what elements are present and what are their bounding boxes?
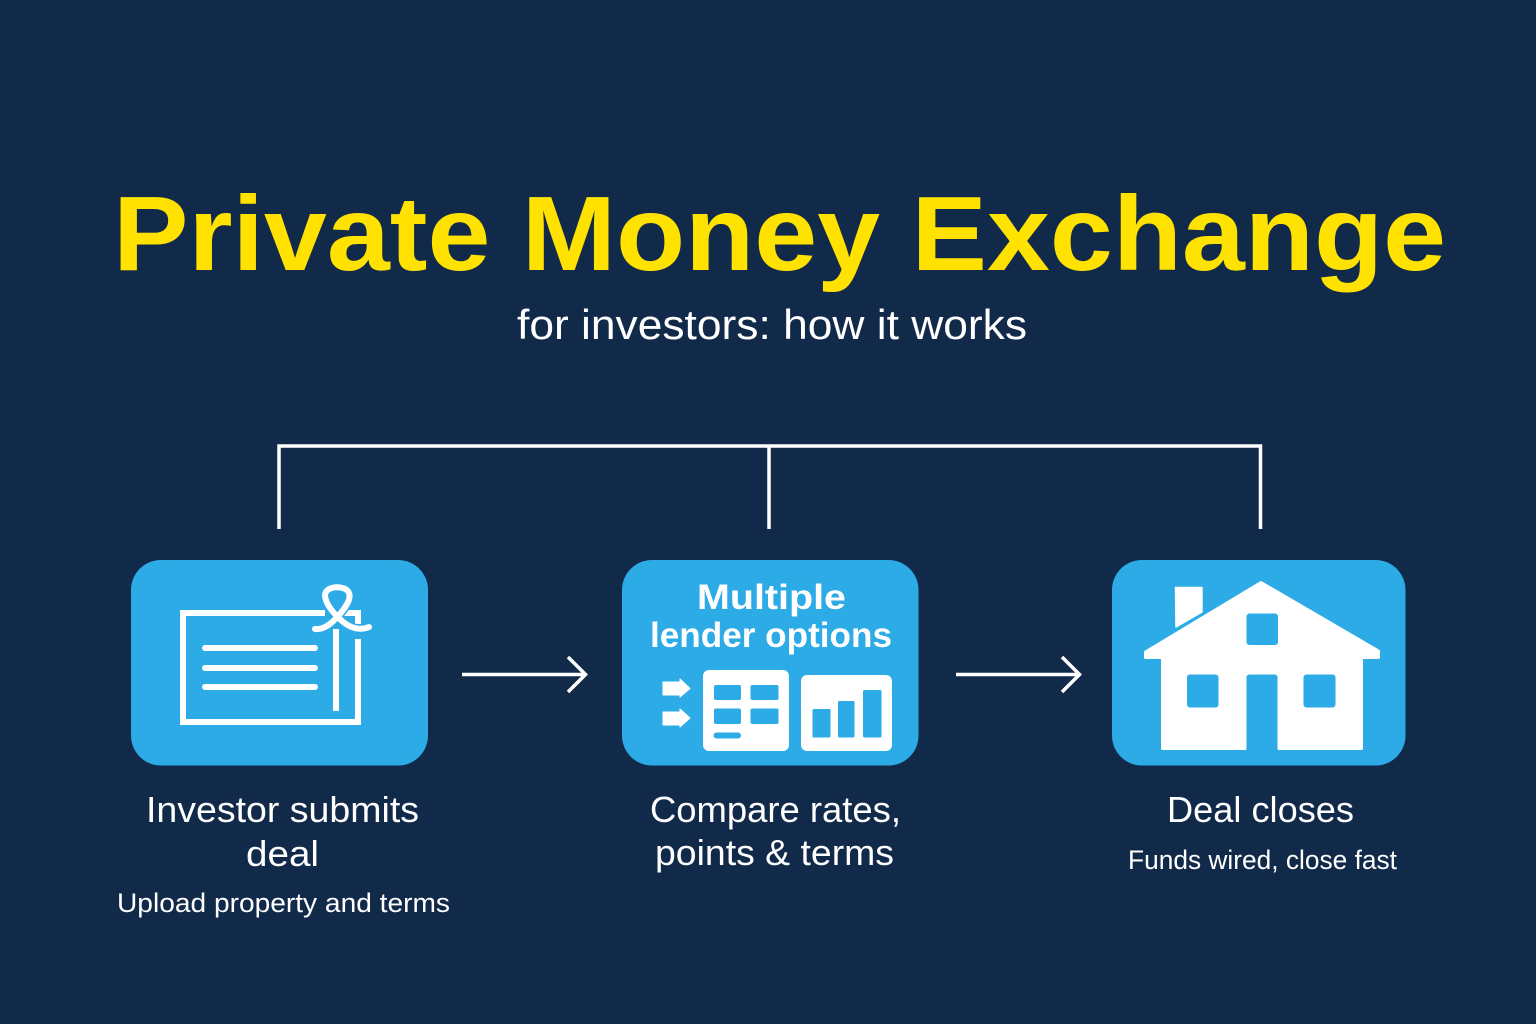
arrow: step two to step three [956, 657, 1080, 692]
panel heading [650, 578, 892, 655]
panel: deal closes [1112, 560, 1406, 766]
label: investor submits deal [117, 789, 450, 918]
panel heading: lender options [650, 616, 892, 655]
subtitle: for investors: how it works [517, 301, 1027, 348]
icon: small arrows [663, 679, 690, 727]
panel: investor submits deal [131, 560, 428, 766]
panel: multiple lender options [622, 560, 918, 766]
label: compare rates: points & terms [655, 832, 894, 873]
label: deal closes: Deal closes [1167, 789, 1354, 830]
arrow: step one to step two [462, 657, 586, 692]
icon: deal document with ribbon [183, 587, 369, 722]
label: compare rates: Compare rates, [650, 789, 901, 830]
icon: table card [703, 670, 789, 751]
label: deal closes: Funds wired, close fast [1128, 845, 1397, 875]
label: investor submits deal: Upload property and terms [117, 888, 450, 918]
title: Private Money Exchange [113, 175, 1446, 293]
label: investor submits deal: deal [246, 833, 319, 874]
label: deal closes [1128, 789, 1397, 875]
panel heading: Multiple [697, 578, 846, 617]
icon: house [1146, 582, 1378, 748]
label: investor submits deal: Investor submits [146, 789, 419, 830]
icon: bar chart card [801, 675, 892, 751]
bracket connector [279, 446, 1260, 529]
label: compare rates [650, 789, 901, 873]
